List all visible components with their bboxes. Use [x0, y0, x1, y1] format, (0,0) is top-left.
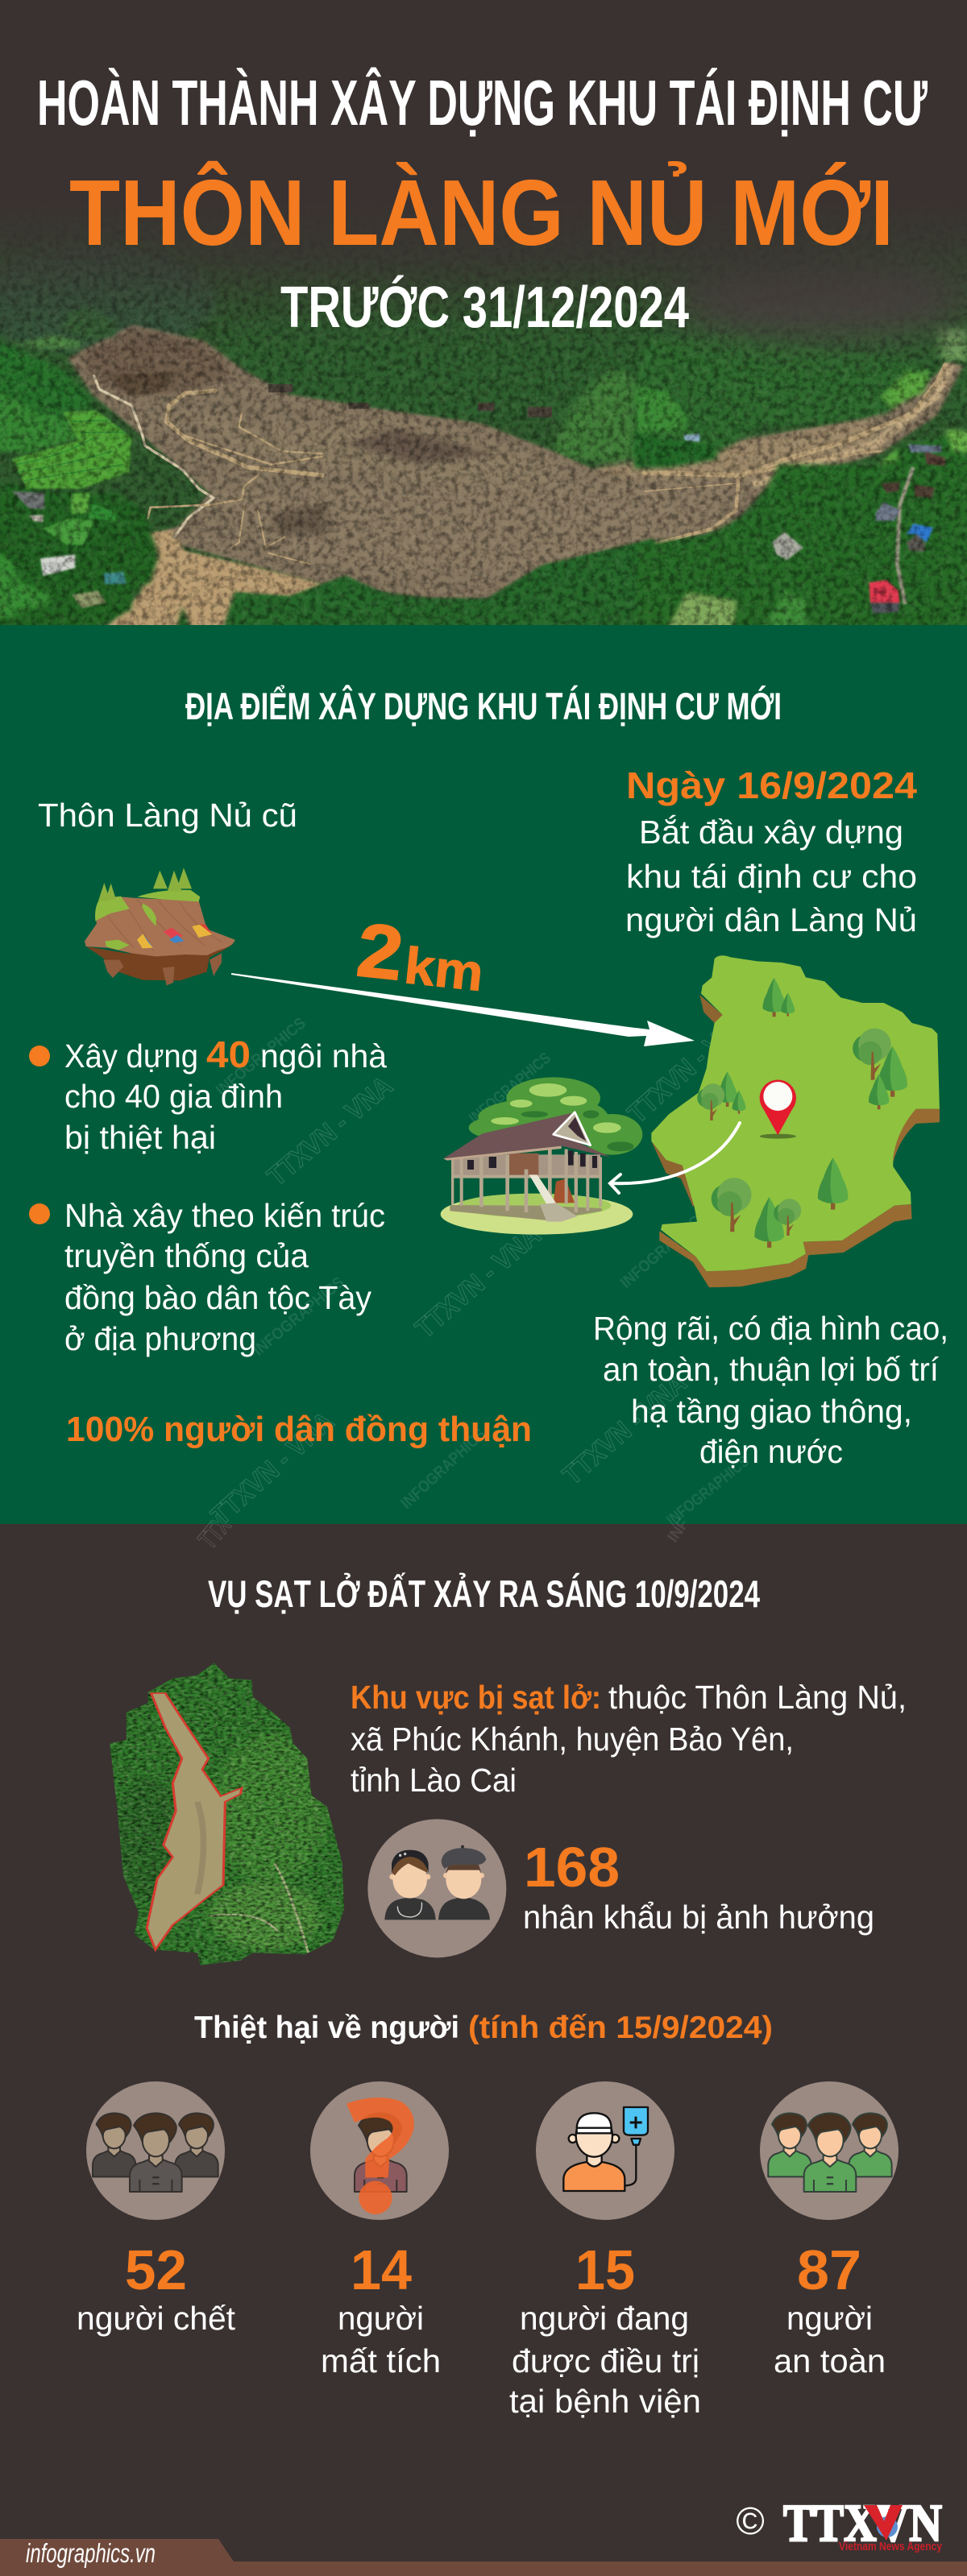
bullet 1: 40: [206, 1033, 251, 1075]
cloud: [669, 258, 967, 338]
card: missing: mất tích: [321, 2342, 441, 2379]
card: missing: 14: [351, 2238, 412, 2301]
text: location: [351, 1679, 907, 1799]
icon: location pin: [760, 1079, 796, 1139]
watermarks: INF: [664, 1516, 692, 1546]
site description: điện nước: [699, 1433, 843, 1470]
card: treated: người đang: [520, 2300, 689, 2337]
watermarks: INFOGRAPHICS: [250, 1274, 347, 1360]
distance label: 2km: km: [401, 936, 486, 1002]
panel: landslide: [77, 1510, 907, 2420]
watermarks: INFOGRAPHICS: [617, 1206, 712, 1292]
panel: header: [0, 68, 967, 625]
footer band: [0, 2538, 967, 2576]
callout: consensus: 100% người dân đồng thuận: [66, 1410, 532, 1449]
label: old village: Thôn Làng Nủ cũ: [38, 797, 297, 834]
card: safe: [760, 2081, 899, 2379]
text: location: tỉnh Lào Cai: [351, 1762, 517, 1799]
watermarks: TTXVN - VNA: [622, 1004, 757, 1129]
dark fade: [0, 161, 967, 335]
watermarks: TTXVN - VNA: [409, 1220, 546, 1344]
photo: landslide valley: [0, 236, 967, 625]
stat: 168: [523, 1836, 874, 1936]
heading: VỤ SẠT LỞ ĐẤT XẢY RA SÁNG 10/9/2024: [208, 1572, 760, 1615]
card: treated: tại bệnh viện: [509, 2383, 701, 2420]
bullet 1: [29, 1033, 387, 1156]
card: missing: người: [338, 2300, 424, 2337]
watermarks: INFOGRAPHICS: [213, 1014, 309, 1100]
mud streams: [94, 376, 322, 564]
bullet 1: cho 40 gia đình: [64, 1078, 283, 1115]
callout: date: Bắt đầu xây dựng: [639, 814, 903, 851]
logo: TTXVN: [736, 2494, 943, 2553]
site description: Rộng rãi, có địa hình cao,: [593, 1310, 948, 1347]
bullet 2: Nhà xây theo kiến trúc: [64, 1197, 385, 1234]
bullet 2: đồng bào dân tộc Tày: [64, 1279, 371, 1316]
icon: stilt house: [441, 1077, 642, 1235]
watermarks: TTXVN - VNA: [262, 1071, 399, 1192]
dark centre haze: [161, 201, 838, 282]
panel background: [0, 625, 967, 1524]
distance label: 2km: [353, 907, 489, 1004]
card: treated: [509, 2081, 701, 2420]
stat: 168: nhân khẩu bị ảnh hưởng: [523, 1899, 874, 1936]
mud flow: [68, 325, 963, 629]
subheading: [194, 2011, 773, 2045]
watermarks: INFOGRAPHICS: [466, 1050, 554, 1128]
bullet 1: ngôi nhà: [260, 1037, 387, 1075]
title line 3: TRƯỚC 31/12/2024: [280, 275, 689, 340]
heading: ĐỊA ĐIỂM XÂY DỰNG KHU TÁI ĐỊNH CƯ MỚI: [185, 685, 782, 727]
card: deaths: [77, 2081, 236, 2337]
card: missing: [310, 2081, 449, 2379]
bullet 2: [29, 1197, 385, 1357]
arrow: to new site: [231, 973, 695, 1046]
subheading: (tính đến 15/9/2024): [468, 2011, 773, 2045]
logo: TTXVN: Vietnam News Agency: [839, 2540, 943, 2553]
footer band: infographics.vn: [26, 2538, 156, 2568]
forest and mud grain texture: [0, 243, 967, 625]
card: deaths: 52: [125, 2238, 187, 2301]
text: location: xã Phúc Khánh, huyện Bảo Yên,: [351, 1721, 794, 1758]
icon: landslide island: [85, 868, 235, 985]
bottom centre forest: [222, 537, 658, 625]
watermarks: INFOGRAPHICS: [663, 1452, 753, 1530]
bullet 2: truyền thống của: [64, 1237, 309, 1274]
bullet 1: Xây dựng: [64, 1037, 198, 1075]
forest foreground: [0, 306, 193, 636]
site description: an toàn, thuận lợi bố trí: [603, 1351, 940, 1388]
text: location: thuộc Thôn Làng Nủ,: [608, 1679, 907, 1716]
callout: date: người dân Làng Nủ: [625, 901, 917, 938]
watermarks: [205, 1004, 757, 1531]
icon: couple: [367, 1819, 506, 1957]
bullet 2: ở địa phương: [64, 1320, 256, 1357]
card: treated: được điều trị: [512, 2342, 699, 2379]
icon: site map: [651, 955, 940, 1287]
distance label: 2km: 2: [353, 907, 407, 996]
watermarks: TTXVN - VNA: [557, 1368, 693, 1491]
callout: date: khu tái định cư cho: [626, 858, 917, 895]
panel: new site: [0, 625, 967, 1531]
watermarks: [193, 1510, 692, 1555]
watermarks: INFOGRAPHICS: [397, 1425, 489, 1513]
card: safe: người: [786, 2300, 873, 2337]
card: safe: 87: [797, 2238, 861, 2301]
arrow: to house: [610, 1123, 740, 1193]
site description: [593, 1310, 948, 1470]
stat: 168: 168: [524, 1836, 620, 1899]
logo: TTXVN: TTXVN: [783, 2494, 942, 2553]
callout: date: [625, 764, 917, 938]
text: location: Khu vực bị sạt lở:: [351, 1679, 601, 1716]
site description: hạ tầng giao thông,: [631, 1393, 912, 1430]
watermarks: TTXVN - VNA: [205, 1406, 340, 1531]
subheading: Thiệt hại về người: [194, 2011, 459, 2045]
aerial map: [105, 1660, 351, 1968]
card: safe: an toàn: [774, 2342, 886, 2379]
card: deaths: người chết: [77, 2300, 236, 2337]
callout: date: Ngày 16/9/2024: [626, 764, 917, 806]
watermarks: TTX: [193, 1510, 237, 1555]
bullet 1: bị thiệt hại: [64, 1119, 216, 1156]
card: treated: 15: [575, 2238, 635, 2301]
logo: TTXVN: ©: [736, 2500, 765, 2543]
